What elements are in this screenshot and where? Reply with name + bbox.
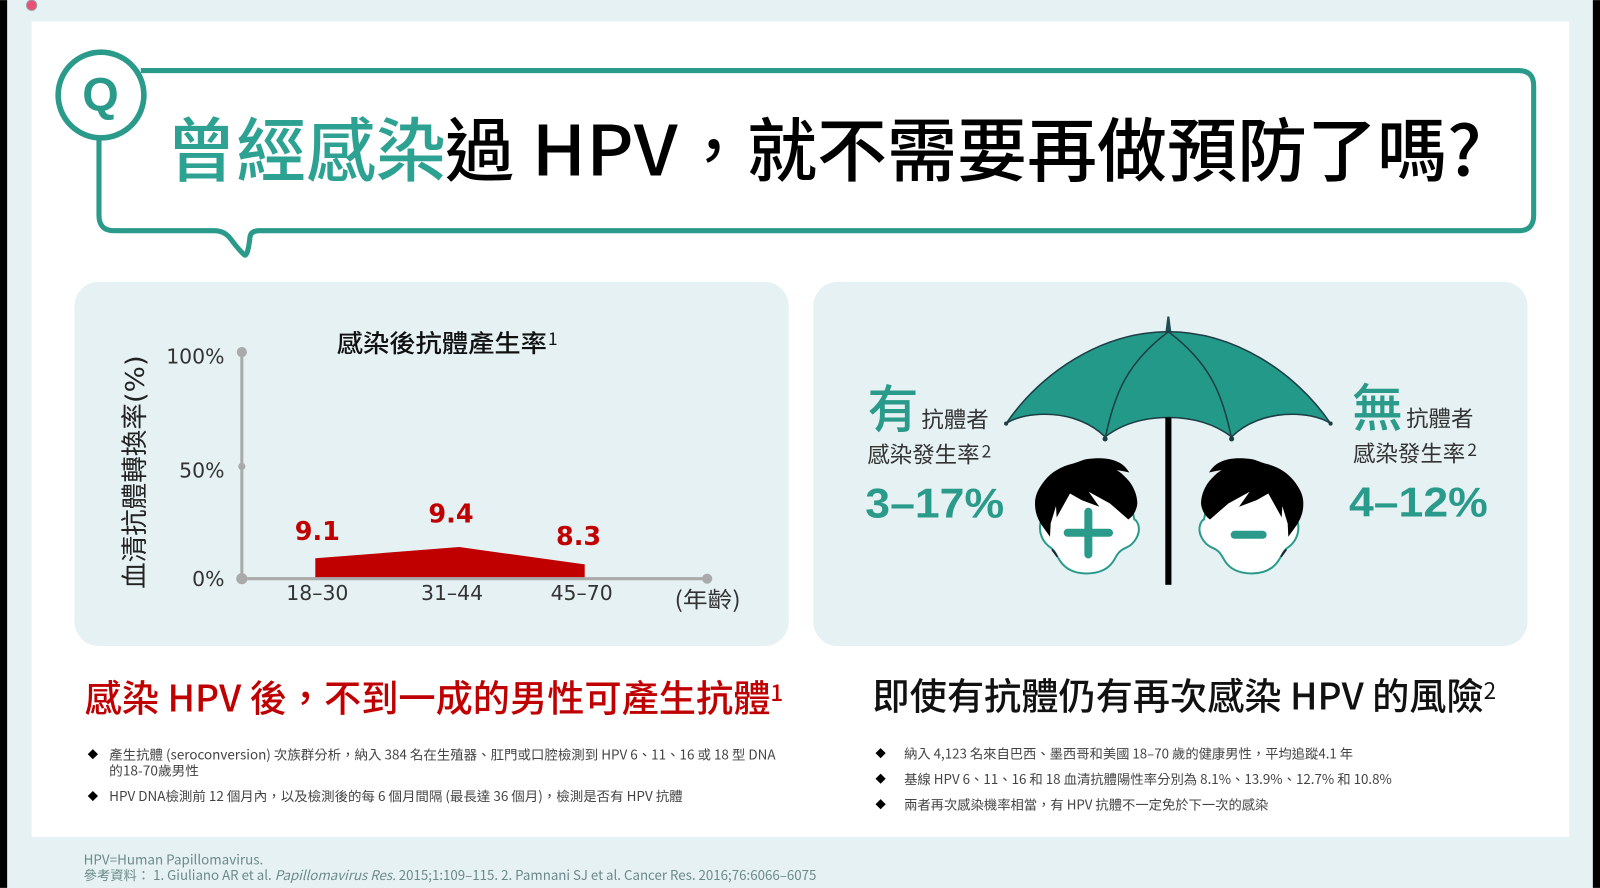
x ticks: 31–44 xyxy=(421,581,483,605)
chart title: 感染後抗體產生率 xyxy=(337,325,547,360)
heading: right conclusion: 2 xyxy=(1484,674,1496,706)
y ticks: 100% xyxy=(166,344,224,368)
chart title footnote: 1 xyxy=(548,325,558,350)
text: with antibody rate xyxy=(865,369,1004,526)
x axis unit: (年齡) xyxy=(674,582,741,614)
status dot xyxy=(27,0,37,10)
footnote: HPV=Human Papillomavirus. xyxy=(84,849,263,868)
data values: 9.4 xyxy=(428,500,474,530)
Q badge xyxy=(58,52,144,138)
text: with antibody rate: 感染發生率 xyxy=(867,437,980,469)
title: ， xyxy=(679,96,748,196)
question speech bubble xyxy=(58,52,1534,255)
area chart xyxy=(236,347,712,584)
Q badge: Q xyxy=(82,68,119,120)
bullet list: right: 基線 HPV 6、11、16 和 18 血清抗體陽性率分別為 8.1%、13.9%、12.7% 和 10.8% xyxy=(904,769,1392,788)
x ticks xyxy=(286,581,613,605)
heading: left conclusion: 感染 HPV 後，不到一成的男性可產生抗體 xyxy=(85,668,770,722)
text: without antibody rate: 感染發生率 xyxy=(1353,436,1465,468)
data values xyxy=(295,500,601,552)
data values: 8.3 xyxy=(556,522,601,552)
text: with antibody rate: 有 xyxy=(867,369,918,443)
bullet list: right xyxy=(876,743,1392,813)
panel: umbrella comparison xyxy=(813,282,1528,646)
text: with antibody rate: 2 xyxy=(982,437,991,462)
text: without antibody rate: 抗體者 xyxy=(1406,402,1473,434)
umbrella xyxy=(1004,316,1333,585)
bullet list: right: 兩者再次感染機率相當，有 HPV 抗體不一定免於下一次的感染 xyxy=(904,794,1268,813)
icon: head without antibody xyxy=(1199,458,1303,573)
bullet list: left xyxy=(88,744,776,805)
text: without antibody rate: 無 xyxy=(1352,368,1403,442)
y ticks: 0% xyxy=(192,567,224,591)
panel: antibody chart xyxy=(74,282,789,646)
footnote: 參考資料： 1. Giuliano AR et al. Papillomavirus Res. 2015;1:109–115. 2. Pamnani SJ et al. Cancer Res. 2016;76:6066–6075 xyxy=(84,865,816,884)
icon: head with antibody xyxy=(1035,458,1139,573)
title: 就不需要再做預防了嗎? xyxy=(747,96,1482,196)
bullet list: left: 產生抗體 (seroconversion) 次族群分析，納入 384 名在生殖器、肛門或口腔檢測到 HPV 6、11、16 或 18 型 DNA xyxy=(109,744,776,763)
data values: 9.1 xyxy=(295,517,340,547)
bullet list: left: 的18-70歲男性 xyxy=(109,761,199,780)
bullet list: right: 納入 4,123 名來自巴西、墨西哥和美國 18–70 歲的健康男性，平均追蹤4.1 年 xyxy=(904,743,1353,762)
y axis title: (%) xyxy=(121,355,151,403)
title: 曾經感染 xyxy=(166,96,446,196)
title: 過 xyxy=(445,96,514,196)
heading: right conclusion: 即使有抗體仍有再次感染 HPV 的風險 xyxy=(872,666,1484,720)
heading: left conclusion: 1 xyxy=(770,676,783,708)
text: with antibody rate: 抗體者 xyxy=(921,403,989,435)
text: without antibody rate: 4–12% xyxy=(1349,478,1488,525)
y axis title: 血清抗體轉換率 xyxy=(113,403,152,589)
text: without antibody rate: 2 xyxy=(1467,436,1477,461)
footnote xyxy=(84,849,816,884)
y ticks: 50% xyxy=(179,459,224,483)
x ticks: 18–30 xyxy=(286,581,348,605)
title: HPV xyxy=(532,96,678,196)
bullet list: left: HPV DNA檢測前 12 個月內，以及檢測後的每 6 個月間隔 (最長達 36 個月)，檢測是否有 HPV 抗體 xyxy=(109,786,683,805)
text: without antibody rate xyxy=(1349,368,1488,525)
x ticks: 45–70 xyxy=(551,581,613,605)
text: with antibody rate: 3–17% xyxy=(865,479,1004,526)
y ticks xyxy=(166,344,224,591)
title xyxy=(166,96,1482,196)
